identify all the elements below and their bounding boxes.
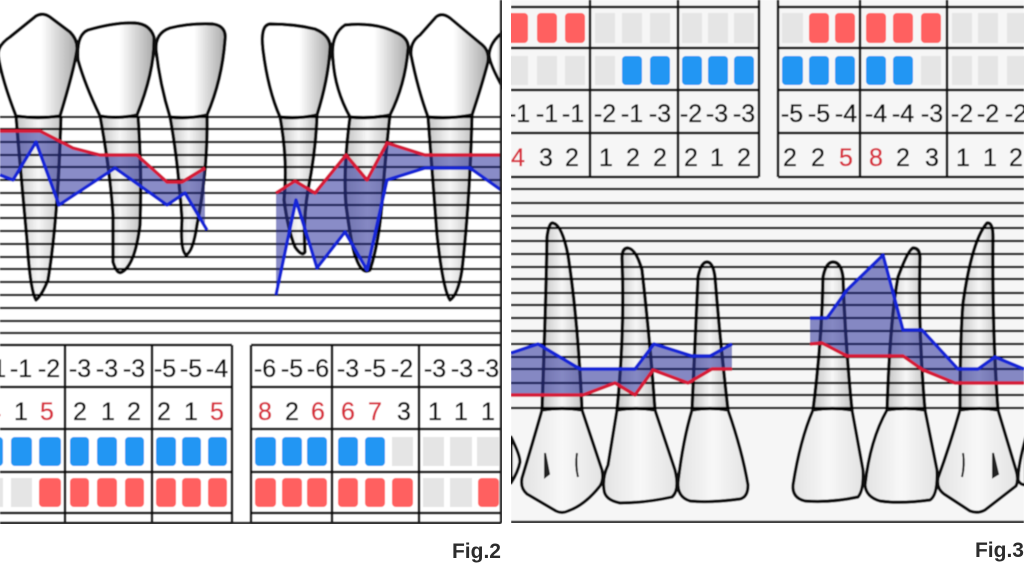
row: probing depth values: 5 [210,398,224,426]
row: gingival margin values: -3 [123,355,145,383]
row: red indicator squares [505,13,1024,43]
row: gingival margin values [0,358,499,378]
row: probing depth values: 2 [127,398,141,426]
attachment area left group [0,131,207,230]
row: probing depth values: 1 [481,398,495,426]
row: probing depth values: 2 [73,398,87,426]
row: gingival margin values: -4 [892,100,914,128]
row: gingival margin values [511,104,1024,123]
row: gingival margin values: -3 [424,355,446,383]
attachment area right group [810,255,1024,383]
row: gingival margin values: -5 [180,355,202,383]
row: probing depth values: 8 [258,398,272,426]
row: gingival margin values: -4 [835,100,857,128]
row: probing depth values: 5 [839,144,853,172]
row: blue indicator squares [0,437,499,466]
table: upper measurements [505,0,1024,177]
row: gingival margin values: -2 [680,100,702,128]
row: probing depth values: 2 [1009,144,1023,172]
row: gingival margin values: -1 [536,100,558,128]
panel: Fig.2 lower teeth chart [0,0,503,523]
row: gingival margin values: -4 [206,355,228,383]
row: gingival margin values: -3 [649,100,671,128]
row: probing depth values: 2 [285,398,299,426]
row: probing depth values: 2 [737,144,751,172]
row: probing depth values: 1 [599,144,613,172]
attachment area right group [276,143,501,295]
lower teeth row [0,14,503,300]
row: gingival margin values: -1 [10,355,32,383]
row: probing depth values: 1 [710,144,724,172]
row: gingival margin values: -2 [977,100,999,128]
row: probing depth values: 1 [454,398,468,426]
row: gingival margin values: -5 [781,100,803,128]
row: gingival margin values: -5 [808,100,830,128]
row: probing depth values: 4 [511,144,525,172]
row: gingival margin values: -3 [69,355,91,383]
row: gingival margin values: -2 [38,355,60,383]
row: probing depth values: 2 [653,144,667,172]
row: probing depth values: 1 [428,398,442,426]
row: probing depth values: 3 [539,144,553,172]
caption: Fig.3: Fig.3 [975,539,1024,562]
row: probing depth values: 1 [184,398,198,426]
row: probing depth values: 1 [14,398,28,426]
row: probing depth values: 3 [925,144,939,172]
row: gingival margin values: -6 [307,355,329,383]
row: probing depth values: 5 [40,398,54,426]
row: probing depth values: 2 [565,144,579,172]
row: gingival margin values: -3 [337,355,359,383]
row: probing depth values: 2 [896,144,910,172]
row: probing depth values: 1 [983,144,997,172]
row: probing depth values [0,401,495,421]
caption: Fig.2: Fig.2 [452,540,501,563]
attachment area left group [511,344,732,395]
row: probing depth values: 7 [368,398,382,426]
upper teeth row [511,223,1024,512]
row: gingival margin values: -1 [621,100,643,128]
row: red indicator squares [0,478,499,507]
row: gingival margin values: -2 [391,355,413,383]
row: gingival margin values: -2 [951,100,973,128]
row: probing depth values: 2 [811,144,825,172]
table: lower measurements [0,345,501,523]
row: gingival margin values: -5 [364,355,386,383]
row: gingival margin values: -5 [154,355,176,383]
row: gingival margin values: -3 [477,355,499,383]
row: gingival margin values: -1 [562,100,584,128]
row: gingival margin values: -3 [921,100,943,128]
row: gingival margin values: -4 [865,100,887,128]
row: gingival margin values: -5 [281,355,303,383]
row: gingival margin values: -2 [594,100,616,128]
row: gingival margin values: -1 [508,100,530,128]
panel: Fig.3 upper teeth chart [505,0,1024,522]
row: gingival margin values: -3 [706,100,728,128]
row: probing depth values: 2 [157,398,171,426]
row: probing depth values: 3 [397,398,411,426]
row: probing depth values: 8 [869,144,883,172]
row: probing depth values: 6 [311,398,325,426]
row: gingival margin values: -3 [733,100,755,128]
row: blue indicator squares [505,56,1024,85]
row: probing depth values: 1 [956,144,970,172]
row: gingival margin values: -3 [96,355,118,383]
row: probing depth values: 1 [101,398,115,426]
row: probing depth values: 6 [341,398,355,426]
row: gingival margin values: -3 [451,355,473,383]
row: probing depth values: 2 [783,144,797,172]
row: gingival margin values: -6 [254,355,276,383]
row: probing depth values: 2 [626,144,640,172]
row: probing depth values [511,148,1022,167]
row: probing depth values: 2 [684,144,698,172]
